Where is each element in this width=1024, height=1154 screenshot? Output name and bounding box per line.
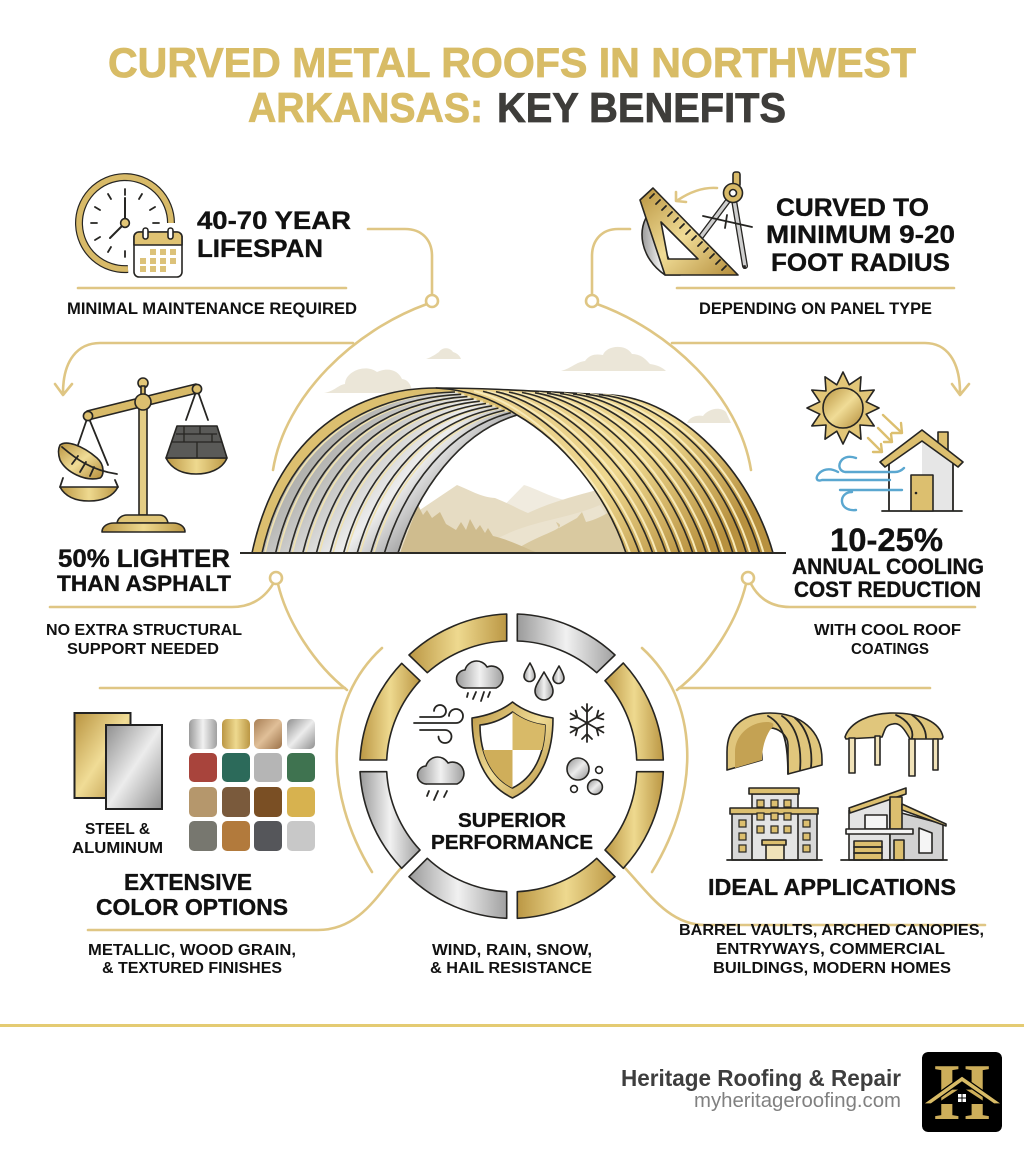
text: cool roof coatings: COATINGS	[851, 641, 929, 658]
panel: color options	[72, 713, 315, 977]
color swatches	[189, 719, 315, 851]
text: finishes: METALLIC, WOOD GRAIN,	[88, 942, 296, 959]
heading: superior performance	[431, 810, 593, 854]
company website: myheritageroofing.com	[694, 1090, 901, 1112]
text: applications list: ENTRYWAYS, COMMERCIAL	[716, 941, 945, 958]
panel: cooling cost	[792, 372, 984, 658]
icon: rain cloud	[456, 661, 503, 701]
heading: lighter	[57, 545, 231, 596]
icon: modern home	[841, 788, 947, 860]
heading: cooling: COST REDUCTION	[794, 577, 981, 602]
heading: cooling	[792, 522, 984, 602]
icon: shield	[472, 702, 553, 798]
heading: lighter: 50% LIGHTER	[58, 545, 230, 573]
icon: snowflake	[568, 704, 606, 742]
text: finishes: & TEXTURED FINISHES	[102, 960, 282, 977]
heading: radius: CURVED TO	[776, 194, 929, 222]
text: no extra support	[46, 622, 242, 658]
text: applications list: BUILDINGS, MODERN HOMES	[713, 960, 951, 977]
text: applications list	[679, 922, 984, 977]
text: no extra support: SUPPORT NEEDED	[67, 641, 219, 658]
heading: lifespan	[197, 207, 351, 263]
icon: wind	[414, 705, 463, 743]
heading: lifespan: LIFESPAN	[197, 235, 323, 263]
heading: radius	[766, 194, 955, 277]
panel: superior performance ring	[360, 614, 663, 918]
panel: lifespan	[67, 177, 357, 318]
icon: arched canopy	[845, 713, 943, 776]
heading: superior performance: PERFORMANCE	[431, 832, 593, 854]
label: steel and aluminum	[72, 821, 163, 857]
panel: ideal applications	[679, 713, 984, 977]
heading: radius: MINIMUM 9-20	[766, 221, 955, 249]
heading: color options: COLOR OPTIONS	[96, 894, 288, 920]
heading: cooling: ANNUAL COOLING	[792, 554, 984, 579]
text: resistance: & HAIL RESISTANCE	[430, 960, 592, 977]
text: cool roof coatings: WITH COOL ROOF	[814, 622, 961, 639]
icon: clock and calendar	[79, 177, 182, 277]
icon: storm cloud	[418, 757, 464, 800]
icon: sun, wind and house	[807, 372, 963, 511]
panel: lighter than asphalt	[46, 378, 242, 658]
clouds	[324, 347, 731, 423]
ring segments	[360, 614, 663, 918]
company name: Heritage Roofing & Repair	[621, 1065, 901, 1091]
text: resistance: WIND, RAIN, SNOW,	[432, 942, 592, 959]
icon: commercial building	[727, 788, 822, 860]
title: KEY BENEFITS	[497, 84, 786, 131]
text: cool roof coatings	[814, 622, 961, 658]
gold panel ribs	[474, 391, 764, 553]
icon: hail	[567, 758, 602, 794]
heading: cooling: 10-25%	[830, 522, 943, 558]
label: steel and aluminum: STEEL &	[85, 821, 150, 838]
heading: radius: FOOT RADIUS	[771, 249, 950, 277]
title: CURVED METAL ROOFS IN NORTHWEST	[108, 39, 916, 86]
footer	[0, 1024, 1024, 1137]
text: minimal maintenance: MINIMAL MAINTENANCE REQUIRED	[67, 300, 357, 318]
title: ARKANSAS:	[248, 84, 483, 131]
gold panels	[436, 388, 773, 553]
icon: water drops	[524, 663, 564, 700]
text: applications list: BARREL VAULTS, ARCHED CANOPIES,	[679, 922, 984, 939]
logo: H	[934, 1049, 990, 1137]
icon: balance scale	[58, 378, 227, 532]
icon: steel and aluminum sheets	[74, 713, 162, 809]
icon: barrel vault	[727, 713, 822, 774]
gold rim	[252, 388, 517, 553]
mountain landscape	[400, 485, 625, 552]
heading: lifespan: 40-70 YEAR	[197, 207, 351, 235]
heading: ideal applications: IDEAL APPLICATIONS	[708, 874, 956, 900]
text: finishes	[88, 942, 296, 977]
text: panel type: DEPENDING ON PANEL TYPE	[699, 300, 932, 318]
icon: ruler and compass	[640, 172, 752, 275]
label: steel and aluminum: ALUMINUM	[72, 840, 163, 857]
heading: color options	[96, 869, 288, 920]
silver underside	[262, 392, 517, 553]
curved metal roof arch	[240, 388, 786, 555]
text: resistance	[430, 942, 592, 977]
panel: radius	[640, 172, 955, 318]
silver panel ribs	[262, 392, 517, 553]
text: no extra support: NO EXTRA STRUCTURAL	[46, 622, 242, 639]
icon: feather	[58, 443, 103, 479]
connector lines	[50, 229, 985, 930]
heading: color options: EXTENSIVE	[124, 869, 252, 895]
heading: superior performance: SUPERIOR	[458, 810, 567, 832]
heading: lighter: THAN ASPHALT	[57, 571, 231, 596]
title	[108, 39, 916, 131]
